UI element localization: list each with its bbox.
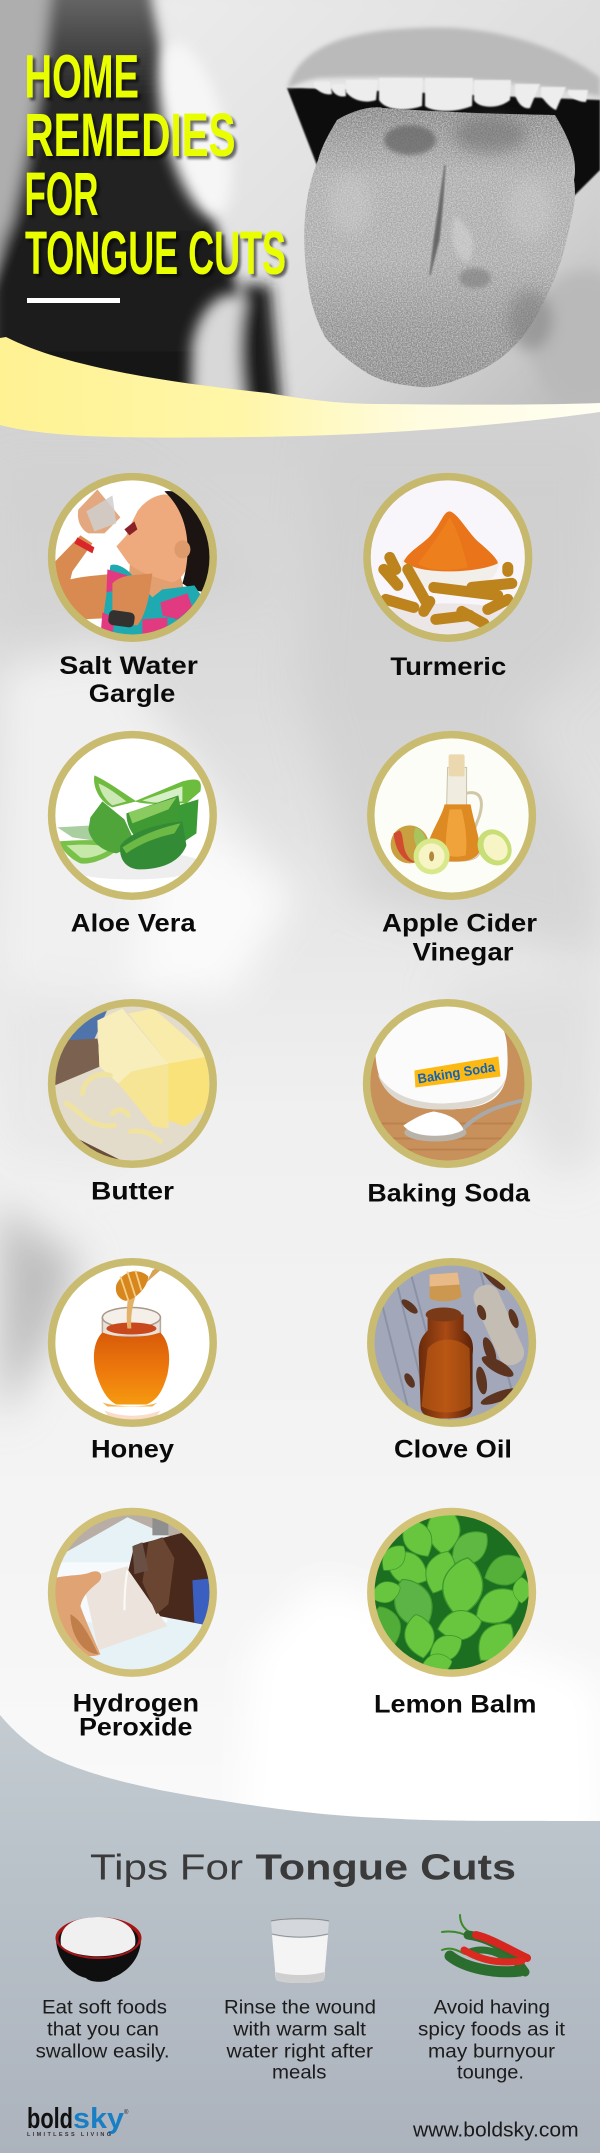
upper lip <box>288 28 600 96</box>
photo: girl gargling <box>47 472 217 642</box>
tip text: rinse: meals <box>272 2063 326 2084</box>
footer panel: tips <box>0 1715 600 2153</box>
remedy: Salt Water Gargle <box>47 472 217 708</box>
remedy: Lemon Balm <box>367 1506 537 1719</box>
label: Gargle <box>89 680 175 708</box>
label <box>73 1690 199 1742</box>
photo: butter blocks on paper <box>47 998 217 1168</box>
tip text: spicy foods <box>418 1997 566 2084</box>
photo: honey jar with dipper <box>47 1258 217 1428</box>
tips heading: Tips For <box>90 1846 243 1887</box>
tip text: rinse <box>224 1997 376 2084</box>
title: HOME <box>24 42 139 110</box>
yellow swoosh <box>0 337 600 438</box>
gold ring <box>52 1003 213 1164</box>
remedy: Aloe Vera <box>47 730 217 938</box>
tip text: soft foods: that you can <box>47 2019 159 2040</box>
photo: lemon balm leaves <box>367 1506 537 1677</box>
label: Honey <box>91 1435 174 1463</box>
gold ring <box>367 477 529 638</box>
gold ring <box>371 1512 532 1673</box>
label <box>59 652 198 708</box>
logo: boldsky: ® <box>124 2109 129 2116</box>
face <box>155 0 600 440</box>
tips heading: Tongue Cuts <box>256 1846 516 1887</box>
tip text: soft foods <box>36 1997 170 2062</box>
label: Clove Oil <box>394 1435 512 1463</box>
remedy: Honey <box>47 1258 217 1463</box>
label: Salt Water <box>59 652 198 680</box>
background: abstract grey facets <box>0 400 600 1850</box>
tip text: rinse: Rinse the wound <box>224 1997 376 2018</box>
label: Butter <box>91 1177 174 1205</box>
photo: turmeric powder and roots <box>363 472 533 642</box>
dress <box>104 564 200 634</box>
photo: vinegar bottle and apples <box>367 730 537 900</box>
logo: boldsky <box>27 2103 129 2138</box>
label: Hydrogen <box>73 1690 199 1718</box>
remedy: Clove Oil <box>367 1255 537 1463</box>
gold ring <box>371 735 532 896</box>
tip text: spicy foods: spicy foods as it <box>418 2019 566 2040</box>
icon: rice bowl <box>56 1917 142 1982</box>
open mouth <box>124 521 137 535</box>
photo: cut aloe vera leaves <box>47 730 217 900</box>
teeth <box>314 78 588 111</box>
forearm and upper arm <box>56 535 108 620</box>
tip text: rinse: water right after <box>225 2041 374 2062</box>
gold ring <box>52 1512 213 1673</box>
tip text: spicy foods: may burnyour <box>428 2041 556 2062</box>
gold ring <box>371 1262 532 1423</box>
tip text: spicy foods: Avoid having <box>434 1997 550 2018</box>
remedy: Turmeric <box>363 472 533 681</box>
title: FOR <box>24 160 98 228</box>
label: Turmeric <box>390 653 506 681</box>
tip text: rinse: with warm salt <box>232 2019 367 2040</box>
tongue shading and fissure <box>328 117 554 350</box>
photo: clove oil bottle with cloves <box>367 1255 537 1428</box>
remedy: Hydrogen Peroxide <box>47 1507 217 1742</box>
hair <box>164 491 212 592</box>
logo: boldsky: bold <box>27 2103 73 2135</box>
mouth interior <box>287 88 600 196</box>
icon: glass of salt water <box>271 1919 329 1983</box>
gold ring <box>367 1003 528 1164</box>
photo: baking soda jar and spoon <box>362 998 532 1168</box>
label: Lemon Balm <box>374 1691 536 1719</box>
remedy: Butter <box>47 998 217 1205</box>
photo: baking soda jar and spoon: Baking Soda <box>417 1059 496 1086</box>
neck <box>129 564 184 598</box>
title: REMEDIES <box>24 101 236 169</box>
gold ring <box>52 1262 213 1423</box>
tip text: spicy foods: tounge. <box>457 2063 524 2084</box>
icon: chillies <box>442 1915 527 1972</box>
logo: boldsky: sky <box>73 2103 124 2135</box>
website url: www.boldsky.com <box>412 2120 579 2142</box>
hand on chest and watch <box>112 573 152 625</box>
title: TONGUE CUTS <box>25 219 286 287</box>
label: Apple Cider <box>382 910 537 938</box>
label: Peroxide <box>79 1714 193 1742</box>
remedy: Apple Cider Vinegar <box>367 730 537 966</box>
remedy: Baking Soda <box>362 998 532 1208</box>
title <box>24 42 286 287</box>
label: Baking Soda <box>367 1180 531 1208</box>
label: Aloe Vera <box>71 910 197 938</box>
title underline <box>27 298 120 303</box>
face profile <box>116 494 192 582</box>
tip text: soft foods: Eat soft foods <box>42 1997 167 2018</box>
gold ring <box>52 477 213 638</box>
tip text: soft foods: swallow easily. <box>36 2041 170 2062</box>
logo: boldsky: LIMITLESS LIVING <box>27 2132 111 2138</box>
left background and dark hair wedge <box>0 0 246 385</box>
cheek blob and neck shadow <box>148 42 600 396</box>
gold ring <box>52 735 213 896</box>
label <box>382 910 537 966</box>
label: Vinegar <box>412 938 514 966</box>
hero photo: open mouth with tongue <box>0 0 600 450</box>
hand and glass <box>78 489 120 533</box>
tongue <box>304 107 575 387</box>
photo: peroxide poured on cloth <box>47 1507 217 1677</box>
tips heading <box>90 1846 516 1887</box>
